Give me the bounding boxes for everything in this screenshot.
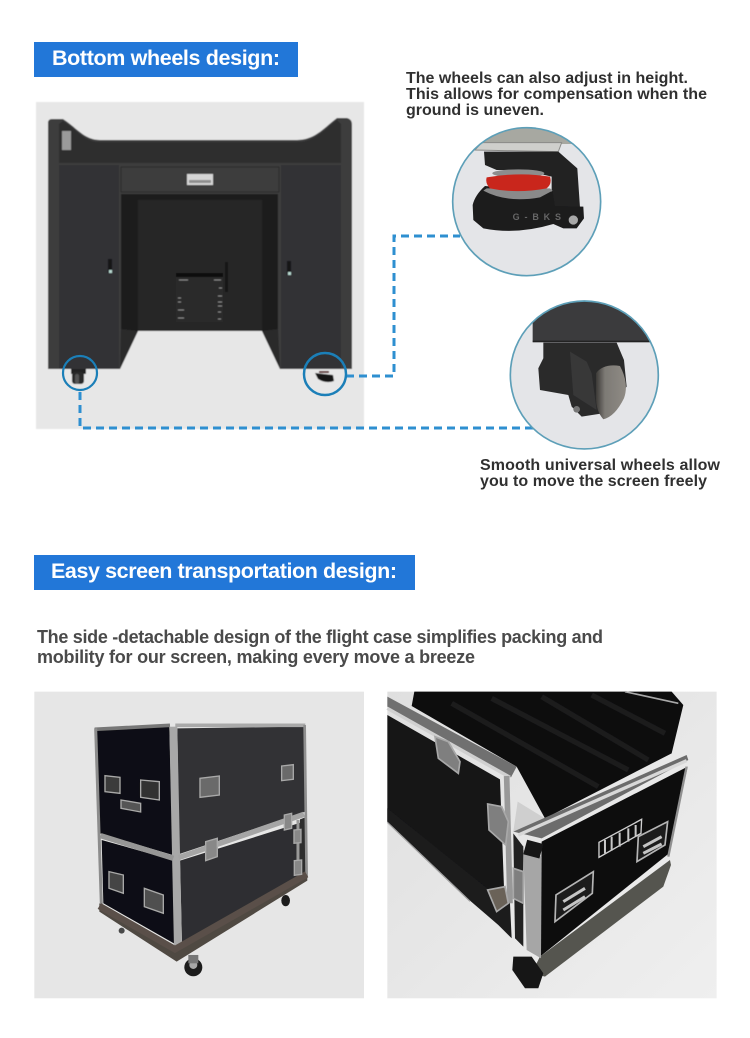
text block: wheel height adjustment: The wheels can also adjust in height. <box>406 70 688 87</box>
text block: universal wheels: Smooth universal wheels allow <box>480 457 721 474</box>
side bumper base <box>532 860 671 977</box>
drawer handle <box>187 174 213 185</box>
heading: bottom wheels design <box>34 42 298 77</box>
text block: wheel height adjustment: This allows for compensation when the <box>406 86 707 103</box>
latches and handles <box>105 765 302 913</box>
control box <box>176 262 228 322</box>
cabinet underside <box>532 302 649 342</box>
left door <box>59 165 119 369</box>
steel collar <box>492 169 544 176</box>
top rail <box>513 755 688 838</box>
connector: right wheel to height-adjust detail <box>346 236 460 376</box>
side handles <box>555 822 668 922</box>
connector: left wheel to universal wheel detail <box>80 392 533 428</box>
aluminium frame rails <box>95 725 307 949</box>
marker: right wheel circle <box>304 353 346 395</box>
side rail <box>668 767 687 857</box>
right face <box>177 727 306 943</box>
case base <box>99 872 307 962</box>
door locks <box>108 259 291 275</box>
caster wheel <box>596 365 626 419</box>
open cavity <box>120 194 280 369</box>
detail circle: height adjustable wheel <box>453 127 601 276</box>
vertical corner rail <box>523 850 542 958</box>
pivot bolt <box>569 215 578 225</box>
interior folds <box>452 695 665 787</box>
detached side door <box>387 697 517 938</box>
flange <box>475 143 562 152</box>
red adjusting ring <box>486 174 551 191</box>
left wheel <box>71 369 86 384</box>
text block: universal wheels <box>480 457 721 490</box>
lower body <box>473 186 584 231</box>
left face <box>97 725 175 944</box>
right wheel <box>315 371 334 382</box>
text block: universal wheels: you to move the screen freely <box>480 473 707 490</box>
panel: black cabinet on wheels <box>36 102 364 429</box>
right door <box>281 165 341 369</box>
text block: side-detachable description: mobility for our screen, making every move a breeze <box>37 647 475 667</box>
warning icons label <box>599 819 642 857</box>
door latches <box>435 737 523 912</box>
top plate <box>484 128 572 144</box>
text block: wheel height adjustment: ground is uneven. <box>406 102 544 119</box>
label plate <box>62 131 71 150</box>
marker: left wheel circle <box>63 356 97 390</box>
lid edge <box>625 692 678 703</box>
corner foot and caster <box>512 957 543 988</box>
axle bolt <box>573 406 580 413</box>
right end panel <box>540 767 688 957</box>
detail circle: universal wheel <box>510 300 673 449</box>
caster housing <box>538 343 627 417</box>
case interior <box>412 692 683 818</box>
top tray <box>59 120 341 163</box>
heading: easy screen transportation design <box>34 555 415 590</box>
photo: open flight case <box>387 692 717 998</box>
text block: side-detachable description <box>37 627 603 667</box>
heading: bottom wheels design: Bottom wheels design: <box>52 46 280 70</box>
text block: wheel height adjustment <box>406 70 707 119</box>
interior floor <box>513 802 545 832</box>
brand mark: G-BKS <box>513 212 561 222</box>
text block: side-detachable description: The side -detachable design of the flight case simplifies packing and <box>37 627 603 647</box>
cabinet body <box>48 118 352 369</box>
wheel body upper <box>484 152 580 207</box>
photo: closed flight case <box>34 692 364 998</box>
drawer <box>121 167 279 192</box>
lower body grey recess <box>483 188 553 199</box>
heading: easy screen transportation design: Easy screen transportation design: <box>51 559 397 583</box>
caster wheels <box>119 895 290 976</box>
